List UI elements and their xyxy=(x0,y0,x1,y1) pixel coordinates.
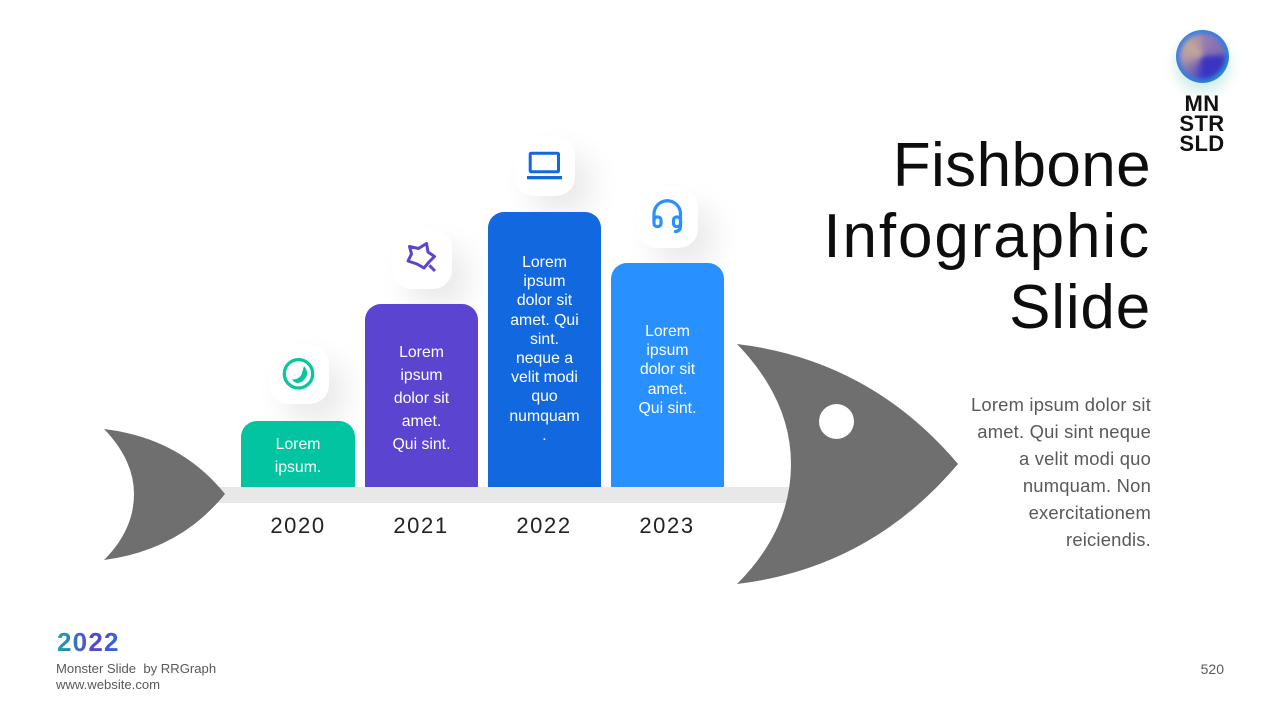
bar 2023: dolor sit xyxy=(640,361,695,378)
bar 2021: dolor sit xyxy=(394,390,449,407)
icon: laptop xyxy=(515,136,575,196)
bar 2022: velit modi xyxy=(511,369,578,386)
bar 2022: sint. xyxy=(530,331,559,348)
bar 2022: amet. Qui xyxy=(510,312,579,329)
bar 2022: numquam xyxy=(509,408,580,425)
bar 2021: amet. xyxy=(402,413,441,430)
bar 2021: ipsum xyxy=(400,367,443,384)
logo text: MN xyxy=(1184,91,1220,116)
description text: a velit modi quo xyxy=(1019,448,1151,469)
bar 2023: amet. xyxy=(648,381,687,398)
bar 2022 xyxy=(488,212,601,487)
fish head xyxy=(737,344,958,584)
icon: headset xyxy=(638,188,698,248)
page number: 520 xyxy=(1201,661,1224,677)
icon: moon xyxy=(269,344,329,404)
description text: numquam. Non xyxy=(1023,475,1151,496)
bar 2021: Qui sint. xyxy=(393,436,450,453)
icon: magic wand star xyxy=(392,229,452,289)
bar 2020 xyxy=(241,421,355,487)
title: Infographic xyxy=(823,202,1151,271)
title xyxy=(823,131,1151,342)
bar 2020: Lorem xyxy=(276,436,320,453)
bar 2022: . xyxy=(542,427,547,444)
bar 2020: ipsum. xyxy=(275,459,321,476)
year 2021: 2021 xyxy=(393,513,449,538)
bar 2022: dolor sit xyxy=(517,292,572,309)
bar 2021: Lorem xyxy=(399,344,444,361)
footer credits: Monster Slide by RRGraph xyxy=(56,661,216,676)
bar 2022: ipsum xyxy=(523,273,566,290)
year 2022: 2022 xyxy=(516,513,572,538)
logo text: STR xyxy=(1179,111,1225,136)
footer year: 2022 xyxy=(57,627,120,657)
year 2020: 2020 xyxy=(270,513,326,538)
description text: reiciendis. xyxy=(1066,529,1151,550)
title: Fishbone xyxy=(893,131,1151,200)
bar 2023: Qui sint. xyxy=(639,400,696,417)
bar 2023 xyxy=(611,263,724,487)
description text xyxy=(971,394,1151,550)
logo xyxy=(1170,30,1235,156)
logo text xyxy=(1179,91,1225,156)
footer credits xyxy=(56,661,216,692)
bar 2022: neque a xyxy=(516,350,573,367)
bar 2022: quo xyxy=(531,388,558,405)
footer credits: www.website.com xyxy=(56,677,160,692)
year 2023: 2023 xyxy=(639,513,695,538)
fishbone spine xyxy=(205,487,795,503)
description text: amet. Qui sint neque xyxy=(977,421,1151,442)
bar 2023: ipsum xyxy=(646,342,689,359)
bar 2022: Lorem xyxy=(522,254,567,271)
fish tail xyxy=(104,429,225,560)
description text: exercitationem xyxy=(1029,502,1151,523)
bar 2021 xyxy=(365,304,478,487)
logo text: SLD xyxy=(1179,131,1225,156)
bar 2023: Lorem xyxy=(645,323,690,340)
description text: Lorem ipsum dolor sit xyxy=(971,394,1151,415)
title: Slide xyxy=(1009,273,1151,342)
logo sphere xyxy=(1176,30,1229,83)
